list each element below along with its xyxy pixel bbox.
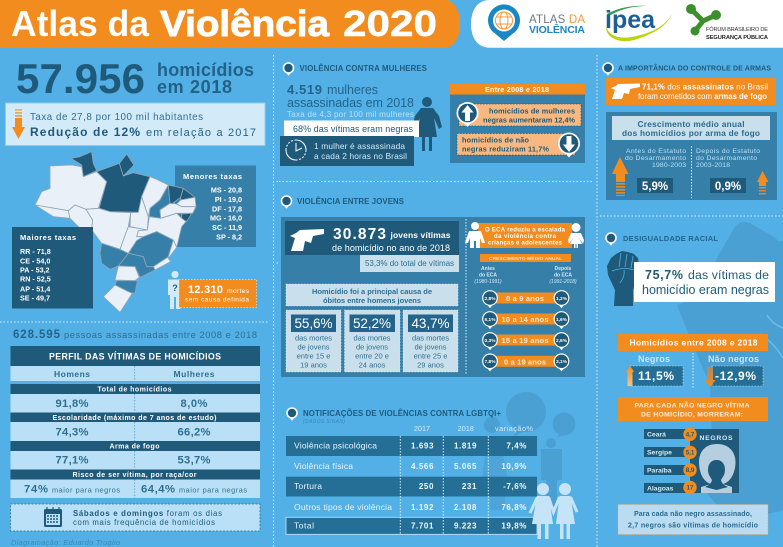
- icon: person with afro: [699, 444, 736, 493]
- logo: ipea: ipea: [605, 6, 656, 34]
- chart: crescimento médio anual: do ECA: [479, 273, 497, 279]
- row: 15 a 19 anos: 0,3%: [485, 338, 496, 344]
- section: violência contra mulheres: [280, 62, 585, 166]
- title: 2020: [343, 3, 437, 44]
- table: notificações: [286, 424, 537, 534]
- table: notificações: 76,8%: [501, 503, 527, 512]
- credit: Diagramação: Eduardo Truglio: [11, 538, 120, 547]
- table: perfil das vítimas de homicídios: 74%: [24, 484, 48, 496]
- table: notificações: 4.566: [411, 462, 434, 471]
- panel: menores taxas: DF - 17,8: [212, 204, 242, 214]
- icon: arrow up: [456, 102, 478, 127]
- panel: crescimento médio anual: Depois do Estatuto: [696, 148, 760, 155]
- stat: 43,7%: 29 anos: [417, 360, 444, 370]
- icon: person with question mark: ?: [172, 283, 178, 293]
- callout: 53,3%: [360, 255, 459, 272]
- callout: 75,7%: [634, 262, 775, 302]
- table: notificações: -7,6%: [503, 482, 527, 491]
- panel: maiores taxas: [12, 227, 93, 308]
- icon: small arrow up: [757, 171, 768, 194]
- callout: 53,3%: 53,3% do total de vítimas: [365, 259, 454, 268]
- panel: crescimento médio anual: do Desarmamento: [696, 155, 757, 162]
- callout: 2,7 negros: Para cada não negro assassinado,: [634, 511, 752, 518]
- panel: maiores taxas: AP - 51,4: [20, 284, 50, 294]
- stat: 52,2%: entre 20 e: [355, 352, 389, 360]
- icon: calendar: [44, 507, 62, 527]
- icon: pin: [286, 407, 298, 421]
- callout: 1 mulher a cada 2 horas: a cada 2 horas no Brasil: [314, 151, 407, 161]
- callout: 75,7%: homicídio eram negras: [642, 283, 769, 297]
- row: 15 a 19 anos: 2,6%: [556, 338, 568, 344]
- chart: crescimento médio anual: Antes: [481, 266, 495, 272]
- callout: 12.310 mortes sem causa definida: 12.310: [188, 284, 223, 296]
- icon: pin: [281, 195, 292, 209]
- table: notificações: 19,8%: [501, 522, 527, 531]
- table: perfil das vítimas de homicídios: 53,7%: [178, 454, 211, 466]
- panel: menores taxas: SC - 11,9: [212, 223, 242, 232]
- table: notificações: Total: [294, 521, 314, 531]
- icon: gun: [290, 229, 324, 251]
- callout: 12.310 mortes sem causa definida: [168, 271, 256, 309]
- panel: maiores taxas: PA - 53,2: [20, 266, 50, 274]
- row: 0 a 19 anos: 3,1%: [556, 359, 568, 365]
- logo: Fórum Brasileiro de Segurança Pública: FÓRUM BRASILEIRO DE: [706, 26, 768, 33]
- stat: não negros -12,9%: [704, 366, 763, 387]
- callout: 71,1%: 71,1% dos assassinatos no Brasil: [642, 82, 768, 92]
- icon: two women holding hands: [530, 483, 577, 539]
- callout: 2,7 negros: 2,7 negros são vítimas de homicídio: [628, 522, 758, 530]
- stat: 4.519 mulheres: 4.519: [287, 82, 322, 97]
- table: notificações: variação%: [495, 424, 534, 433]
- chart: crescimento médio anual: do ECA: [554, 273, 572, 279]
- table: perfil das vítimas de homicídios: 64,4%: [141, 484, 175, 496]
- stat: 43,7%: de jovens: [414, 342, 447, 352]
- table: perfil das vítimas de homicídios: 91,8%: [56, 398, 89, 410]
- stat: 5,9%: [637, 178, 673, 193]
- callout: 75,7%: das vítimas de: [688, 268, 769, 282]
- logos panel: [471, 0, 783, 48]
- chart: crescimento médio anual: (1980-1991): [474, 279, 502, 285]
- callout: ECA: da violência contra: [494, 234, 557, 240]
- panel: crescimento médio anual: [606, 112, 777, 200]
- row: 15 a 19 anos: [482, 332, 569, 350]
- row: 0 a 9 anos: 0 a 9 anos: [506, 294, 544, 303]
- headline: 57.956 homicídios: homicídios: [157, 60, 254, 80]
- icon: arrow down: [558, 132, 580, 158]
- row: 0 a 9 anos: [482, 290, 569, 308]
- callout: 1 mulher a cada 2 horas: 1 mulher é assassinada: [314, 141, 405, 151]
- callout: principal causa: [286, 284, 458, 306]
- table: perfil das vítimas de homicídios: maior para negras: [179, 486, 247, 494]
- table: perfil das vítimas de homicídios: 8,0%: [180, 398, 208, 410]
- section: controle de armas: [602, 62, 777, 200]
- heading: DESIGUALDADE RACIAL: [623, 234, 718, 243]
- panel: homicídios entre 2008 e 2018: Negros: [638, 354, 670, 364]
- callout: 12.310 mortes sem causa definida: sem causa definida: [185, 296, 249, 304]
- panel: crescimento médio anual: dos homicídios por arma de fogo: [622, 128, 760, 138]
- stat: não negros -12,9%: -12,9%: [715, 369, 756, 383]
- stat: 52,2%: das mortes: [353, 334, 391, 342]
- icon: woman: [412, 97, 442, 151]
- icon: pin: [605, 232, 617, 246]
- stat: 55,6%: [286, 310, 341, 372]
- table: perfil das vítimas de homicídios: Arma de fogo: [110, 444, 160, 450]
- panel: crescimento médio anual: 1980-2003: [652, 162, 686, 169]
- panel: maiores taxas: Maiores taxas: [20, 233, 76, 242]
- stat: 55,6%: 19 anos: [300, 360, 327, 370]
- panel: homicídios entre 2008 e 2018: [618, 334, 768, 388]
- stat: 4.519 mulheres: Taxa de 4,3 por 100 mil mulheres: [287, 110, 414, 119]
- chart: negros por estado: Paraíba: [647, 468, 672, 474]
- table: notificações: 2018: [458, 424, 474, 433]
- callout: 30.873 jovens vítimas: 30.873: [333, 226, 386, 243]
- table: notificações: 1.192: [411, 503, 434, 512]
- heading: 628.595 pessoas assassinadas: [13, 329, 257, 341]
- table: perfil das vítimas de homicídios: 74,3%: [56, 426, 89, 438]
- chart: negros por estado: Sergipe: [647, 450, 672, 456]
- callout: ECA: crianças e adolescentes: [488, 240, 563, 246]
- table: notificações: 9.223: [454, 522, 477, 531]
- panel: taxa e redução: Taxa de 27,8 por 100 mil habitantes: [30, 112, 203, 123]
- logo: Atlas da Violência: [488, 4, 585, 41]
- panel: homicídios entre 2008 e 2018: Não negros: [708, 354, 759, 364]
- row: 10 a 14 anos: [482, 311, 569, 329]
- callout: 2,7 negros: [618, 504, 768, 534]
- stat: 55,6%: de jovens: [297, 342, 330, 352]
- chart: negros por estado: [644, 428, 739, 494]
- table: perfil das vítimas de homicídios: PERFIL DAS VÍTIMAS DE HOMICÍDIOS: [49, 352, 221, 362]
- table: notificações: 10,9%: [501, 462, 527, 471]
- stat: negros 11,5%: 11,5%: [638, 369, 674, 383]
- table: perfil das vítimas de homicídios: 66,2%: [178, 426, 211, 438]
- logo: Fórum Brasileiro de Segurança Pública: SEGURANÇA PÚBLICA: [706, 34, 768, 41]
- icon: clock: [286, 140, 306, 160]
- banner: para cada não negro: DE HOMICÍDIO, MORRERAM:: [641, 410, 743, 418]
- panel: menores taxas: Menores taxas: [183, 172, 242, 181]
- banner: para cada não negro: [618, 397, 768, 421]
- icon: gun: [611, 84, 640, 99]
- table: notificações: Tortura: [294, 481, 322, 491]
- section: notificações LGBTQI+: [286, 392, 577, 539]
- table: perfil das vítimas de homicídios: Homens: [54, 369, 90, 379]
- chart: crescimento médio anual: CRESCIMENTO MÉDIO ANUAL: [489, 254, 562, 262]
- panel: entre 2008 e 2018: Entre 2008 e 2018: [485, 85, 549, 94]
- table: perfil das vítimas de homicídios: maior para negros: [52, 486, 120, 494]
- row: 0 a 19 anos: [482, 353, 569, 371]
- heading: NOTIFICAÇÕES DE VIOLÊNCIAS CONTRA LGBTQI+: [303, 409, 501, 418]
- stat: 52,2%: 52,2%: [353, 316, 391, 331]
- panel: entre 2008 e 2018: negras aumentaram 12,4%: [483, 116, 576, 124]
- row: 0 a 9 anos: 1,2%: [556, 296, 568, 302]
- callout: sábados e domingos: com mais frequência de homicídios: [73, 518, 215, 527]
- heading: VIOLÊNCIA ENTRE JOVENS: [297, 197, 404, 206]
- logo: Fórum Brasileiro de Segurança Pública: [686, 4, 768, 41]
- chart: negros por estado: 5,1: [686, 450, 695, 456]
- table: perfil das vítimas de homicídios: Risco de ser vítima, por raça/cor: [72, 472, 197, 479]
- source note: (DADOS SINAN): [303, 419, 345, 425]
- table: notificações: 250: [419, 482, 434, 491]
- title: [11, 3, 437, 44]
- logo: Atlas da Violência: VIOLÊNCIA: [529, 23, 585, 36]
- panel: taxa e redução: [6, 103, 265, 146]
- panel: menores taxas: MS - 20,8: [211, 186, 242, 194]
- icon: raised fist: [607, 251, 639, 306]
- icon: boy: [465, 222, 485, 248]
- callout: 71,1%: [606, 78, 776, 105]
- stat: 0,9%: [710, 178, 746, 193]
- row: 0 a 9 anos: 2,8%: [485, 296, 496, 302]
- table: notificações: 2017: [414, 424, 430, 433]
- table: notificações: Violência física: [294, 461, 353, 471]
- table: perfil das vítimas de homicídios: Total de homicídios: [98, 386, 172, 394]
- panel: maiores taxas: SE - 49,7: [20, 294, 50, 302]
- stat: 52,2%: [344, 310, 400, 372]
- panel: crescimento médio anual: do Desarmamento: [625, 155, 686, 162]
- stat: 4.519 mulheres: [287, 82, 414, 119]
- callout: 30.873 jovens vítimas: [285, 221, 459, 255]
- table: notificações: 2.108: [454, 503, 477, 512]
- callout: 68%: 68% das vítimas eram negras: [293, 124, 414, 134]
- icon: pin: [283, 62, 294, 76]
- stat: 52,2%: 24 anos: [359, 360, 386, 370]
- stat: 55,6%: 55,6%: [294, 316, 332, 331]
- panel: menores taxas: PI - 19,0: [215, 195, 242, 204]
- background illustration: large fist: [677, 218, 783, 522]
- logo: ipea: [605, 6, 672, 41]
- table: notificações: 7,4%: [506, 442, 527, 450]
- callout: sábados e domingos: Sábados e domingos foram os dias: [73, 509, 222, 518]
- icon: big arrow up: [612, 157, 628, 196]
- callout: sábados e domingos: [10, 504, 260, 531]
- title: Atlas da: [11, 3, 150, 44]
- row: 10 a 14 anos: 1,6%: [556, 317, 568, 323]
- panel: menores taxas: SP - 8,2: [216, 232, 242, 242]
- panel: homicídios entre 2008 e 2018: Homicídios entre 2008 e 2018: [630, 338, 758, 348]
- stat: negros 11,5%: [626, 366, 683, 386]
- table: notificações: 5.065: [454, 462, 477, 471]
- chart: negros por estado: 4,7: [686, 432, 695, 438]
- section: violência entre jovens: [281, 195, 585, 377]
- panel: maiores taxas: CE - 54,0: [20, 256, 50, 266]
- title banner: [0, 0, 460, 48]
- callout: ECA: [465, 222, 584, 248]
- stat: 52,2%: de jovens: [356, 342, 388, 352]
- panel: entre 2008 e 2018: homicídios de não: [462, 136, 530, 144]
- row: 10 a 14 anos: 10 a 14 anos: [502, 315, 548, 324]
- headline: 57.956 homicídios: 57.956: [16, 55, 145, 102]
- heading: 628.595 pessoas assassinadas: 628.595: [13, 329, 61, 341]
- panel: maiores taxas: RN - 52,5: [20, 274, 51, 284]
- stat: 55,6%: das mortes: [295, 334, 332, 342]
- chart: crescimento médio anual: Depois: [555, 266, 572, 272]
- background illustration: people with speech bubbles: [482, 392, 576, 510]
- callout: 30.873 jovens vítimas: de homicídio no ano de 2018: [332, 243, 450, 253]
- chart: negros por estado: NEGROS: [700, 435, 733, 442]
- stat: 43,7%: [403, 310, 458, 372]
- table: perfil das vítimas de homicídios: Mulheres: [174, 369, 215, 379]
- map of Brazil: [35, 152, 196, 312]
- callout: 68%: [284, 120, 419, 137]
- row: 0 a 19 anos: 0 a 19 anos: [504, 357, 546, 366]
- panel: taxa e redução: em relação a 2017: [146, 127, 256, 139]
- table: perfil das vítimas de homicídios: [10, 346, 260, 498]
- title: Violência: [160, 3, 330, 44]
- stat: 4.519 mulheres: mulheres: [327, 83, 378, 97]
- stat: 5,9%: 5,9%: [642, 181, 668, 193]
- stat: 43,7%: entre 25 e: [414, 352, 447, 360]
- panel: entre 2008 e 2018: negras reduziram 11,7%: [462, 144, 550, 154]
- stat: 43,7%: 43,7%: [412, 316, 450, 331]
- table: notificações: 231: [462, 482, 477, 491]
- stat: 43,7%: das mortes: [412, 334, 449, 342]
- heading: 628.595 pessoas assassinadas: pessoas assassinadas entre 2008 e 2018: [64, 330, 257, 340]
- callout: ECA: O ECA reduziu a escalada: [485, 228, 566, 234]
- headline: 57.956 homicídios: [16, 55, 254, 102]
- callout: 12.310 mortes sem causa definida: mortes: [227, 288, 250, 295]
- panel: menores taxas: [175, 166, 256, 247]
- panel: menores taxas: MG - 16,0: [210, 214, 242, 222]
- heading: VIOLÊNCIA CONTRA MULHERES: [300, 64, 427, 73]
- panel: maiores taxas: RR - 71,8: [20, 247, 51, 256]
- chart: negros por estado: 8,9: [686, 467, 695, 474]
- table: perfil das vítimas de homicídios: Escolaridade (máximo de 7 anos de estudo): [52, 415, 216, 422]
- logo: Atlas da Violência: ATLAS DA: [529, 14, 585, 26]
- chart: negros por estado: Alagoas: [647, 486, 674, 492]
- icon: pin: [602, 62, 614, 76]
- headline: 57.956 homicídios: em 2018: [157, 77, 232, 97]
- panel: crescimento médio anual: Crescimento médio anual: [638, 119, 744, 129]
- banner: para cada não negro: PARA CADA NÃO NEGRO VÍTIMA: [634, 400, 750, 410]
- table: perfil das vítimas de homicídios: 77,1%: [56, 454, 89, 466]
- table: notificações: Violência psicológica: [294, 440, 377, 450]
- panel: crescimento médio anual: 2003-2018: [696, 162, 730, 169]
- row: 10 a 14 anos: 5,1%: [485, 317, 496, 323]
- icon: girl: [568, 223, 584, 248]
- table: notificações: 7.701: [411, 522, 434, 531]
- panel: crescimento médio anual: Antes do Estatuto: [626, 148, 686, 155]
- panel: taxa e redução: Redução de 12%: [30, 125, 140, 139]
- table: notificações: Outros tipos de violência: [294, 502, 392, 512]
- stat: 55,6%: entre 15 e: [297, 352, 330, 360]
- chart: crescimento médio anual: (1991-2018): [549, 279, 577, 285]
- callout: 71,1%: foram cometidos com armas de fogo: [638, 92, 767, 101]
- table: notificações: 1.819: [454, 442, 477, 450]
- section: desigualdade racial: [605, 232, 775, 534]
- panel: entre 2008 e 2018: homicídios de mulheres: [489, 106, 575, 116]
- chart: crescimento médio anual: [474, 254, 577, 371]
- icon: down arrow: [12, 109, 25, 139]
- callout: 75,7%: 75,7%: [645, 268, 683, 282]
- panel background: [281, 217, 585, 377]
- chart: negros por estado: 17: [687, 485, 694, 492]
- callout: 30.873 jovens vítimas: jovens vítimas: [390, 230, 451, 240]
- table: notificações: 1.693: [411, 442, 434, 450]
- stat: 4.519 mulheres: assassinadas em 2018: [287, 96, 414, 110]
- stat: 0,9%: 0,9%: [715, 181, 741, 193]
- callout: 1 mulher a cada 2 horas: [280, 136, 414, 166]
- chart: negros por estado: Ceará: [647, 432, 666, 438]
- row: 0 a 19 anos: 7,8%: [485, 359, 496, 365]
- callout: principal causa: óbitos entre homens jovens: [323, 296, 421, 305]
- panel: entre 2008 e 2018: [450, 84, 585, 163]
- heading: A IMPORTÂNCIA DO CONTROLE DE ARMAS: [618, 64, 771, 72]
- callout: principal causa: Homicídio foi a principal causa de: [312, 287, 432, 296]
- row: 15 a 19 anos: 15 a 19 anos: [502, 336, 548, 345]
